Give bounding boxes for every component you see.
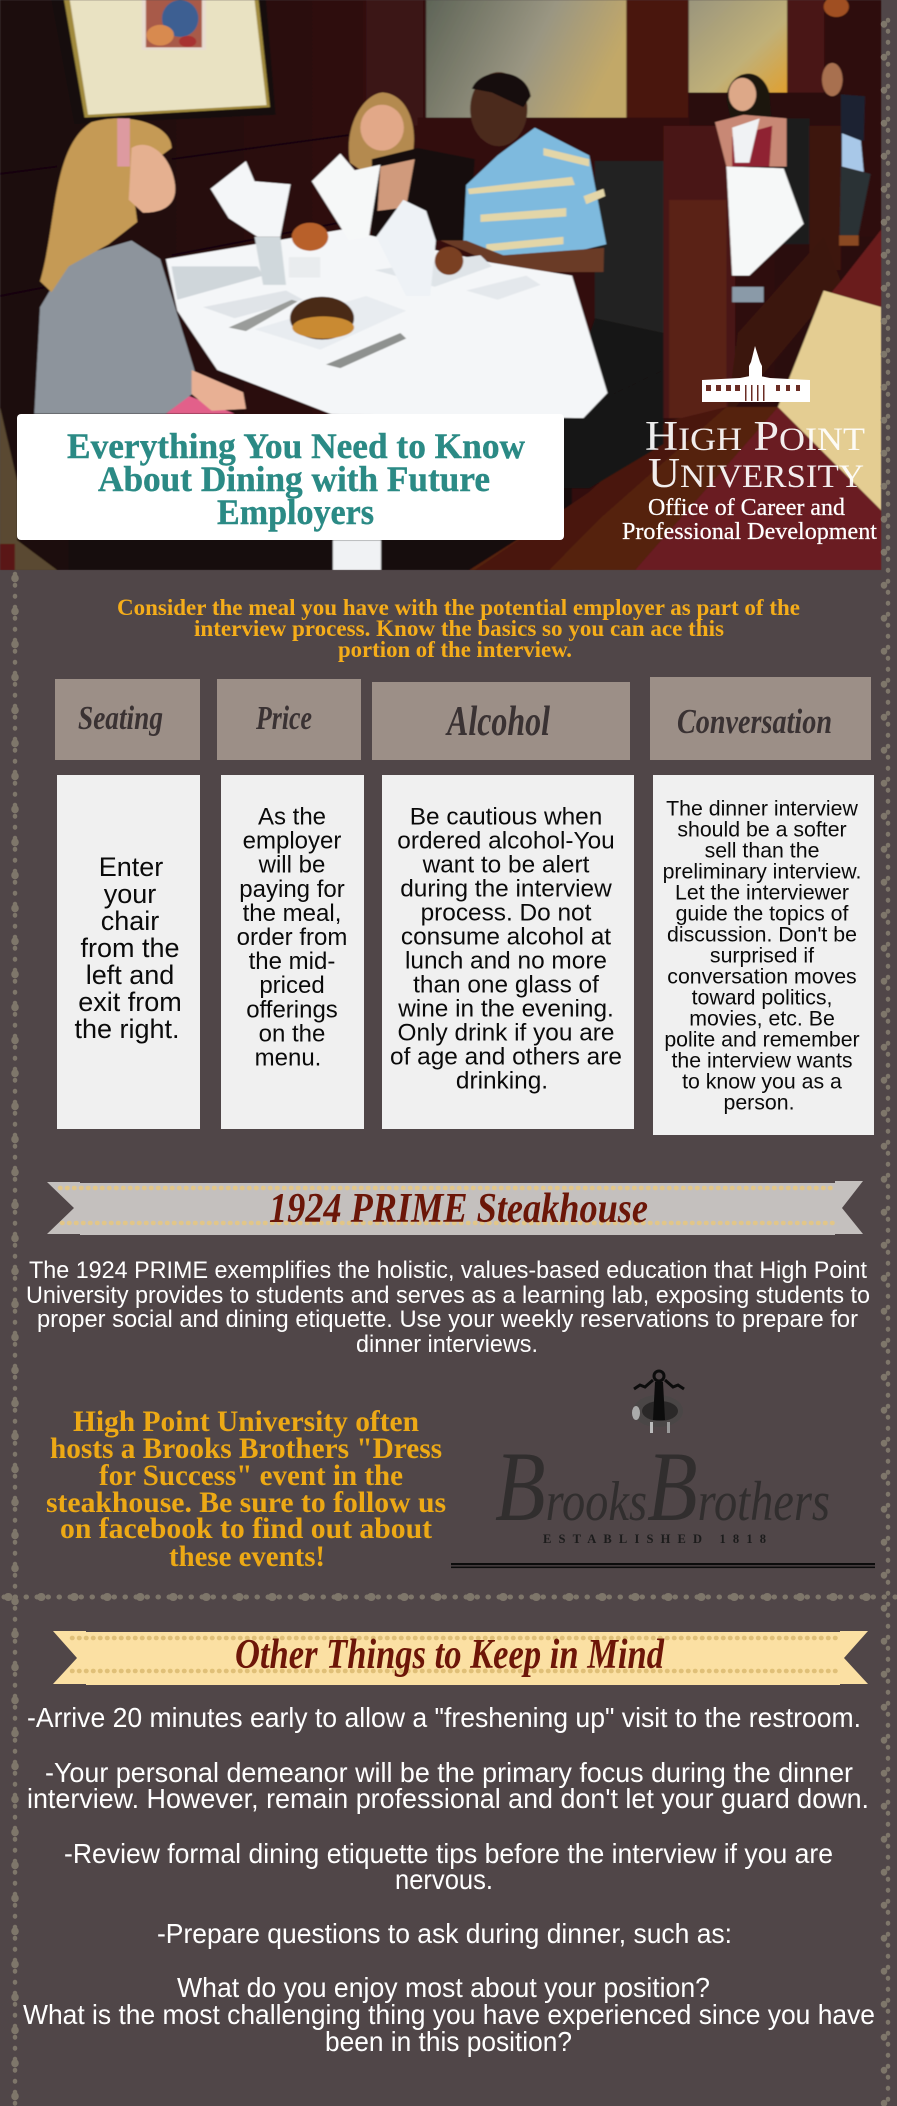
title text: Employers [217,492,374,532]
conversation text card: polite and remember [664,1028,860,1052]
panel: conversation [650,677,874,1135]
script wordmark: BrooksBrothers [495,1431,830,1542]
panel: seating [55,679,200,1129]
reminders text block: been in this position? [325,2026,572,2057]
icon: golden fleece sheep [632,1371,684,1433]
alcohol heading [372,682,630,760]
seating text card: from the [80,933,180,963]
panel: price [217,679,364,1129]
wordmark: HIGH POINT [645,414,865,460]
seating text card: exit from [78,987,182,1017]
Brooks Brothers event callout: hosts a Brooks Brothers "Dress [50,1432,442,1465]
price heading: Price [255,700,312,737]
alcohol text card: Only drink if you are [398,1020,614,1046]
steakhouse paragraph [26,1257,870,1358]
title text: About Dining with Future [98,459,490,499]
price text card: offerings [246,996,338,1023]
picture frame [51,0,276,124]
ribbon heading text: 1924 PRIME Steakhouse [269,1186,648,1232]
alcohol text card: of age and others are [390,1044,622,1070]
alcohol text card: want to be alert [422,852,590,878]
price text card: menu. [255,1044,321,1072]
alcohol text card: ordered alcohol-You [397,828,615,854]
reminders text block: What do you enjoy most about your position? [177,1972,710,2003]
seating heading: Seating [78,700,163,737]
alcohol text card: lunch and no more [405,948,607,974]
steakhouse paragraph: The 1924 PRIME exemplifies the holistic, values-based education that High Point [29,1257,867,1284]
office name: Professional Development [622,519,877,545]
reminders text block: -Review formal dining etiquette tips before the interview if you are [64,1838,833,1869]
conversation text card: person. [723,1091,795,1115]
Brooks Brothers event callout: on facebook to find out about [60,1512,432,1545]
title panel [17,414,564,540]
price text card [221,775,364,1129]
Brooks Brothers logo [451,1371,875,1568]
foreground woman [34,118,246,414]
conversation text card: to know you as a [682,1070,842,1094]
steakhouse paragraph: dinner interviews. [356,1331,538,1358]
conversation text card: guide the topics of [676,902,849,926]
reminders text block: -Your personal demeanor will be the primary focus during the dinner [45,1757,853,1788]
steakhouse paragraph: proper social and dining etiquette. Use your weekly reservations to prepare for [37,1306,858,1333]
price text card: will be [258,852,325,879]
section divider dots [4,1594,897,1600]
office name: Office of Career and [648,495,845,521]
university logo [622,346,877,545]
hero photo: restaurant dining scene [0,0,881,570]
Brooks Brothers event callout: for Success" event in the [99,1459,403,1492]
office name [622,495,877,545]
price text card: the meal, [243,900,341,927]
reminders text block: -Prepare questions to ask during dinner, such as: [157,1918,732,1949]
alcohol text card: process. Do not [421,900,592,926]
title text [67,426,525,532]
ribbon: 1924 PRIME Steakhouse [47,1181,863,1235]
price text card: paying for [239,876,345,903]
Brooks Brothers event callout [46,1405,446,1573]
alcohol text card: than one glass of [413,972,599,998]
mirrored windows and columns [418,0,881,237]
title text: Everything You Need to Know [67,426,525,466]
seating text card: chair [101,906,159,936]
price text card: the mid- [249,948,335,975]
background diners [715,63,871,302]
intro text: portion of the interview. [338,637,572,662]
alcohol text card [382,775,634,1129]
conversation text card: movies, etc. Be [689,1007,835,1031]
reminders text block: What is the most challenging thing you have experienced since you have [23,1999,875,2030]
floor and carpet [69,229,881,570]
table and cloth [166,223,607,418]
steakhouse paragraph: University provides to students and serves as a learning lab, exposing students to [26,1282,870,1309]
ribbon heading text: Other Things to Keep in Mind [235,1632,665,1678]
logo rule [451,1563,875,1568]
alcohol text card: Be cautious when [410,804,602,830]
seating heading [55,679,200,760]
right edge dotted border [884,20,888,2106]
alcohol heading: Alcohol [445,699,550,745]
middle woman [349,92,475,240]
seating text card: Enter [99,852,163,882]
seated guests at main table [34,72,607,418]
seating text card: the right. [74,1014,180,1044]
price text card: priced [259,972,325,999]
conversation text card [653,775,874,1135]
conversation heading [650,677,871,760]
booth [590,117,841,419]
conversation text card: should be a softer [677,818,847,842]
conversation text card: The dinner interview [666,797,859,821]
price text card: order from [237,924,347,951]
conversation text card: discussion. Don't be [667,923,857,947]
ribbon: other things to keep in mind [53,1631,868,1685]
reminders text block: -Arrive 20 minutes early to allow a "freshening up" visit to the restroom. [27,1702,861,1733]
alcohol text card: consume alcohol at [401,924,611,950]
folded napkins [210,154,436,296]
left edge dotted border [13,574,17,2106]
price text card: As the [258,804,326,830]
Brooks Brothers event callout: steakhouse. Be sure to follow us [46,1486,446,1519]
Brooks Brothers event callout: these events! [169,1540,325,1573]
man in striped polo [440,72,606,272]
alcohol text card: during the interview [400,876,612,902]
icon: campus building [702,346,810,402]
reminders text block [23,1702,875,2057]
seating text card [57,775,200,1129]
intro text [117,595,800,662]
conversation text card: conversation moves [667,965,857,989]
conversation heading: Conversation [677,702,832,741]
conversation text card: toward politics, [692,986,832,1010]
alcohol text card: drinking. [456,1068,548,1094]
conversation text card: surprised if [710,944,814,968]
established line: ESTABLISHED 1818 [543,1532,766,1546]
reminders text block: nervous. [395,1864,493,1895]
reminders text block: interview. However, remain professional and don't let your guard down. [27,1783,869,1814]
alcohol text card: wine in the evening. [397,996,614,1022]
price heading [217,679,361,760]
intro text: interview process. Know the basics so you can ace this [194,616,724,641]
floor plinth under the table [333,540,381,570]
price text card: on the [259,1020,325,1047]
seating text card: your [104,879,156,909]
conversation text card: sell than the [705,839,819,863]
seating text card: left and [86,960,174,990]
Brooks Brothers event callout: High Point University often [73,1405,419,1438]
conversation text card: preliminary interview. [663,860,861,884]
price text card: employer [243,828,341,855]
conversation text card: the interview wants [671,1049,853,1073]
conversation text card: Let the interviewer [675,881,849,905]
wordmark: UNIVERSITY [648,451,864,497]
panel: alcohol [372,682,634,1129]
wordmark [645,414,865,497]
intro text: Consider the meal you have with the potential employer as part of the [117,595,800,620]
